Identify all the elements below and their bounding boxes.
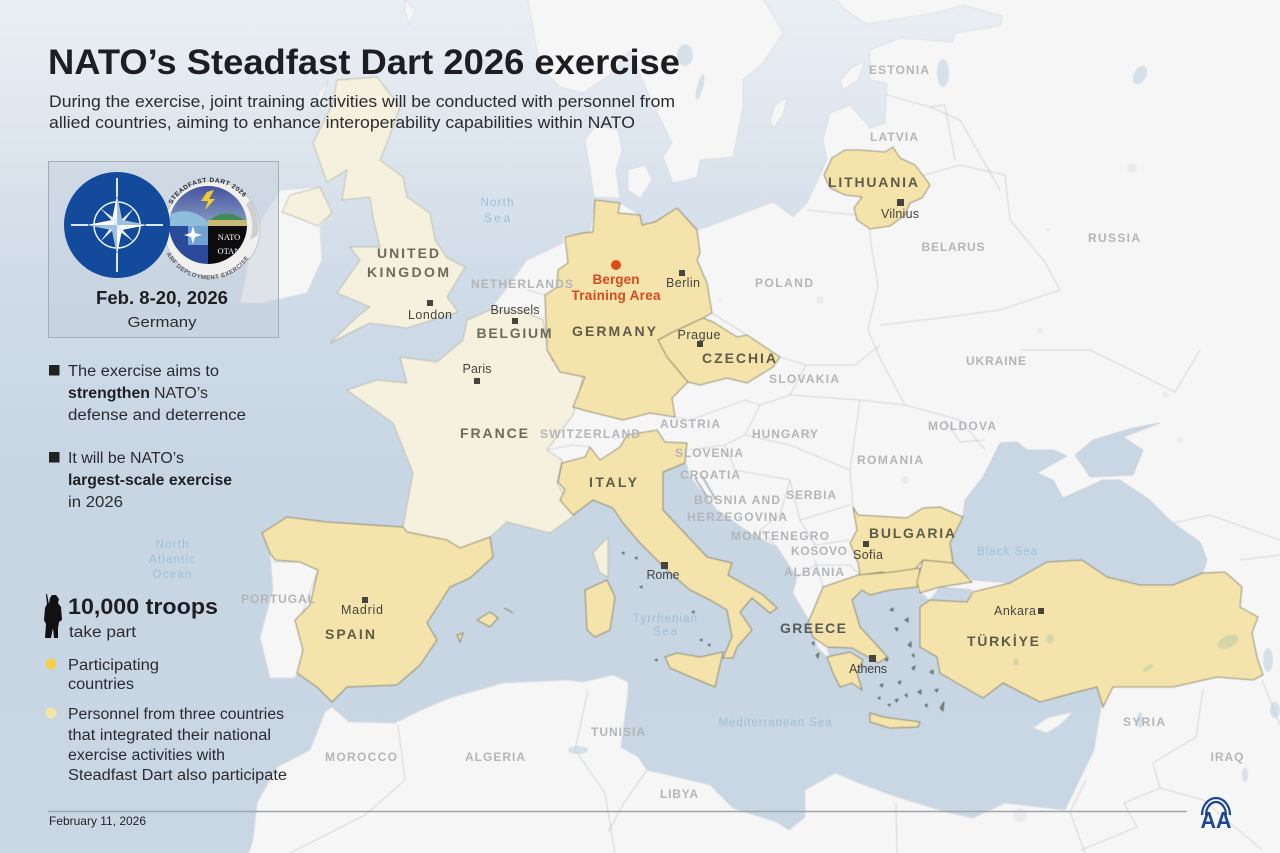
sea label: Tyrrhenian Sea: Tyrrhenian (633, 613, 697, 625)
label: Hungary: HUNGARY (752, 427, 818, 441)
label: Kosovo: KOSOVO (791, 544, 847, 558)
sea label: North Atlantic Ocean (149, 539, 195, 581)
subtitle (49, 92, 675, 132)
callout: Bergen Training Area: Training Area (572, 288, 661, 303)
city: Paris: Paris (462, 362, 492, 376)
title: NATO’s Steadfast Dart 2026 exercise (48, 43, 680, 82)
bullet: strengthen defense: NATO’s (154, 385, 208, 402)
label: Estonia: ESTONIA (869, 63, 929, 77)
callout: Bergen Training Area: Bergen (592, 272, 640, 287)
legend: personnel from three countries: exercise activities with (68, 747, 225, 764)
label: United Kingdom: UNITED (377, 245, 439, 261)
icon: Steadfast Dart badge: OTAN (218, 246, 240, 256)
icon: Steadfast Dart badge: STEADFAST DART 2026 (168, 178, 246, 204)
label: Austria: AUSTRIA (660, 417, 720, 431)
Türkiye lakes (1014, 632, 1241, 673)
legend: personnel from three countries: Steadfast Dart also participate (68, 767, 287, 784)
city: Sofia (853, 541, 883, 562)
Sea of Azov (1075, 423, 1160, 477)
label: Bosnia and Herzegovina: HERZEGOVINA (687, 510, 787, 524)
city: Paris (462, 362, 492, 384)
city: Madrid (341, 597, 383, 617)
label: Morocco: MOROCCO (325, 750, 397, 764)
label: Romania: ROMANIA (857, 453, 923, 467)
sea label: Tyrrhenian Sea: Sea (653, 626, 678, 638)
label: Bulgaria: BULGARIA (869, 525, 955, 541)
sea label: North Atlantic Ocean: North (156, 539, 188, 551)
bullet: largest-scale exercise: largest-scale exercise (68, 472, 232, 489)
legend: personnel from three countries: that integrated their national (68, 727, 271, 744)
city: Rome (646, 562, 680, 582)
legend: participating countries (46, 657, 159, 693)
Black Sea (950, 442, 1207, 585)
city: Athens (849, 655, 887, 676)
map labels (149, 63, 1244, 801)
country: France and Belgium (347, 310, 583, 548)
label: Türkiye: TÜRKİYE (967, 633, 1039, 649)
country: Czechia (658, 318, 780, 385)
troops count: take part (69, 624, 137, 641)
Denmark (585, 125, 652, 198)
label: Iraq: IRAQ (1210, 750, 1244, 764)
legend: participating countries: Participating (68, 657, 159, 674)
internal borders (272, 95, 1280, 853)
country: Peloponnese (827, 652, 863, 690)
Ireland (240, 187, 332, 303)
label: Czechia: CZECHIA (702, 350, 776, 366)
city: Berlin: Berlin (666, 276, 700, 290)
label: Tunisia: TUNISIA (591, 725, 645, 739)
bullet: strengthen defense (49, 363, 246, 424)
label: Slovenia: SLOVENIA (675, 446, 743, 460)
label: Albania: ALBANIA (784, 565, 844, 579)
label: Serbia: SERBIA (786, 488, 836, 502)
label: Italy: ITALY (589, 474, 638, 490)
label: Switzerland: SWITZERLAND (540, 427, 640, 441)
label: United Kingdom: KINGDOM (367, 264, 449, 280)
legend: personnel from three countries: Personnel from three countries (68, 706, 284, 723)
sea label: Tyrrhenian Sea (633, 613, 697, 638)
city: Madrid: Madrid (341, 603, 383, 617)
icon: NATO emblem (64, 172, 170, 278)
sea label: Mediterranean Sea: Mediterranean Sea (718, 717, 832, 729)
troops count: 10,000 troops (68, 594, 218, 619)
city: Vilnius: Vilnius (881, 207, 919, 221)
label: United Kingdom (367, 245, 449, 280)
Northern Ireland (282, 187, 332, 226)
icon: soldier (44, 594, 62, 638)
label: Belgium: BELGIUM (476, 325, 552, 341)
label: Lithuania: LITHUANIA (828, 174, 918, 190)
icon: Steadfast Dart badge: NATO (218, 232, 240, 242)
country: Germany (545, 200, 712, 420)
sea label: North Sea: Sea (484, 213, 511, 225)
bullet: strengthen defense: defense and deterrence (68, 407, 246, 424)
label: Moldova: MOLDOVA (928, 419, 996, 433)
label: Portugal: PORTUGAL (241, 592, 315, 606)
country: Türkiye Anatolia (920, 560, 1263, 707)
country: United Kingdom (313, 77, 465, 343)
lakes (568, 44, 1280, 782)
islands: Balearics (457, 608, 513, 642)
label: Slovakia: SLOVAKIA (769, 372, 839, 386)
subtitle: allied countries, aiming to enhance interoperability capabilities within NATO (49, 113, 635, 132)
country: Bulgaria (850, 507, 963, 578)
bullet: strengthen defense: The exercise aims to (68, 363, 219, 380)
label: Bosnia and Herzegovina (687, 493, 787, 524)
city: Vilnius (881, 199, 919, 221)
country: Sardinia (585, 580, 615, 637)
bullet: strengthen defense: strengthen (68, 385, 150, 402)
city: Sofia: Sofia (853, 548, 883, 562)
country: Crete (870, 713, 920, 728)
bullet: largest-scale exercise (49, 450, 232, 511)
country: Italy (558, 430, 777, 658)
label: Belarus: BELARUS (922, 240, 984, 254)
islands: Croatian coast (695, 476, 716, 500)
label: Greece: GREECE (780, 620, 846, 636)
legend: personnel from three countries (46, 706, 287, 784)
label: Montenegro: MONTENEGRO (731, 529, 829, 543)
label: Germany: GERMANY (572, 323, 657, 339)
Gotland and Saaremaa (770, 62, 865, 128)
label: Latvia: LATVIA (870, 130, 918, 144)
sea label: North Sea (480, 197, 514, 225)
location: Germany (128, 314, 197, 331)
bullet: largest-scale exercise: in 2026 (68, 494, 123, 511)
city: Ankara: Ankara (994, 604, 1036, 618)
label: Libya: LIBYA (660, 787, 698, 801)
icon: AA logo: AA (1200, 807, 1232, 833)
legend: participating countries: countries (68, 676, 134, 693)
label: Algeria: ALGERIA (465, 750, 525, 764)
label: Russia: RUSSIA (1088, 231, 1140, 245)
troops count (68, 594, 218, 641)
label: Bosnia and Herzegovina: BOSNIA AND (694, 493, 780, 507)
Scandinavia (527, 0, 783, 183)
label: Syria: SYRIA (1123, 715, 1165, 729)
country: Sicily (665, 652, 723, 687)
country: Corsica (593, 537, 608, 577)
sea label: Black Sea: Black Sea (977, 546, 1038, 558)
callout: Bergen Training Area (572, 260, 661, 303)
Sea of Marmara (930, 587, 972, 602)
Cyprus (1033, 712, 1073, 733)
label: France: FRANCE (460, 425, 528, 441)
icon: Steadfast Dart badge (166, 178, 260, 280)
icon: Steadfast Dart badge: ARF DEPLOYMENT EXERCISE (166, 253, 249, 280)
northern islands (318, 0, 415, 105)
city: Athens: Athens (849, 662, 887, 676)
label: Spain: SPAIN (325, 626, 375, 642)
city: Berlin (666, 270, 700, 290)
country: Lithuania (824, 147, 930, 229)
sea label: North Atlantic Ocean: Ocean (152, 569, 192, 581)
country: Greece (808, 568, 920, 663)
date line: February 11, 2026 (49, 814, 146, 828)
islands: Aegean and coastal specks (622, 552, 944, 711)
subtitle: During the exercise, joint training activities will be conducted with personnel from (49, 92, 675, 111)
label: Poland: POLAND (755, 276, 813, 290)
land texture: city smudges (718, 163, 1183, 822)
city: Brussels: Brussels (490, 303, 540, 317)
label: Ukraine: UKRAINE (966, 354, 1026, 368)
city: Prague: Prague (678, 328, 721, 342)
city: London (408, 300, 452, 322)
country: Spain (262, 517, 493, 702)
city: Rome: Rome (646, 568, 680, 582)
country: Türkiye Thrace (917, 560, 972, 593)
label: Netherlands: NETHERLANDS (471, 277, 573, 291)
panel: date and logos (48, 161, 279, 338)
city: London: London (408, 308, 452, 322)
city: Brussels (490, 303, 540, 324)
sea label: North Atlantic Ocean: Atlantic (149, 554, 195, 566)
label: Croatia: CROATIA (680, 468, 740, 482)
date: Feb. 8-20, 2026 (96, 288, 228, 308)
bullet: largest-scale exercise: It will be NATO’s (68, 450, 184, 467)
sea label: North Sea: North (480, 197, 514, 209)
